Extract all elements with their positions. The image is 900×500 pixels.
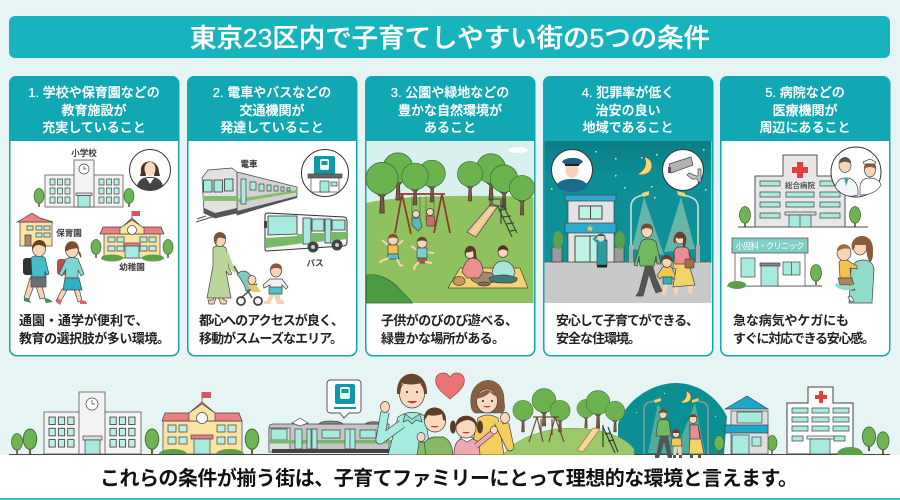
- heading: condition 4: [582, 85, 674, 135]
- ground line: [9, 454, 890, 456]
- icon: mother holding baby: [836, 236, 874, 303]
- text: condition 1 benefit: [19, 313, 170, 346]
- police station: [714, 396, 777, 454]
- icon: kindergarten: [91, 211, 173, 272]
- station speech bubble: [327, 380, 361, 418]
- heading: condition 3: 3. 公園や緑地などの: [391, 85, 509, 100]
- trees: [366, 153, 535, 215]
- heading: condition 5: [759, 85, 851, 135]
- heading: condition 5: 5. 病院などの: [765, 85, 845, 100]
- bush: [366, 275, 412, 303]
- text: condition 3 benefit: 緑豊かな場所がある。: [381, 331, 505, 346]
- text: condition 5 benefit: すぐに対応できる安心感。: [733, 331, 875, 346]
- text: condition 5 benefit: [733, 313, 875, 346]
- icon: general hospital: [738, 155, 868, 227]
- panel: condition 4 safety: [543, 76, 713, 356]
- text: condition 4 benefit: 安心して子育てができる、: [556, 313, 699, 328]
- swing set: [395, 194, 450, 234]
- hill with playground: [503, 389, 634, 455]
- conclusion band: [0, 455, 900, 500]
- panel: condition 5 medical: [720, 76, 890, 356]
- text: condition 1 benefit: 通園・通学が便利で、: [19, 313, 148, 328]
- text: condition 2 benefit: 都心へのアクセスが良く、: [199, 313, 344, 328]
- kindergarten: [159, 392, 259, 459]
- officer portrait: [552, 150, 592, 192]
- walking family: [634, 224, 695, 296]
- text: condition 3 benefit: 子供がのびのび遊べる、: [381, 313, 518, 328]
- heading: condition 5: 周辺にあること: [759, 120, 851, 135]
- conclusion band: これらの条件が揃う街は、子育てファミリーにとって理想的な環境と言えます。: [100, 466, 798, 490]
- hospital: [787, 387, 889, 461]
- police station: [552, 195, 625, 268]
- saluting officer: [594, 234, 607, 268]
- heading: condition 2: 交通機関が: [239, 103, 305, 118]
- family group: [380, 373, 510, 455]
- icon: teacher portrait: [130, 150, 170, 191]
- heading: condition 1: [28, 85, 160, 135]
- heading: condition 4: 4. 犯罪率が低く: [582, 85, 674, 100]
- camera badge: [662, 150, 704, 190]
- icon: commuter train: 電車: [240, 159, 258, 169]
- heading: condition 5: 医療機関が: [772, 103, 838, 118]
- icon: children walking to school: [23, 240, 87, 305]
- icon: nursery school: [17, 213, 82, 246]
- text: condition 1 benefit: 教育の選択肢が多い環境。: [19, 331, 170, 346]
- icon: pediatric clinic: [727, 238, 822, 289]
- icon: nursery school: 保育園: [56, 228, 82, 238]
- picnic family: [448, 245, 528, 288]
- train: [269, 418, 393, 453]
- text: condition 5 benefit: 急な病気やケガにも: [733, 313, 849, 328]
- panel: condition 1 education: [9, 76, 179, 356]
- running children: [380, 234, 434, 270]
- heading: condition 3: [391, 85, 509, 135]
- slide: [467, 198, 517, 237]
- icon: elementary school: 小学校: [71, 148, 97, 158]
- icon: bus: バス: [306, 258, 324, 268]
- panel: condition 3 nature: [365, 76, 535, 356]
- daughter: [450, 416, 498, 455]
- title banner: [9, 16, 890, 58]
- icon: general hospital: 総合病院: [785, 180, 815, 190]
- title banner: 東京23区内で子育てしやすい街の5つの条件: [190, 23, 710, 53]
- doctor and nurse badge: [831, 147, 881, 197]
- heading: condition 2: [213, 85, 331, 135]
- icon: commuter train: [196, 159, 297, 222]
- school: [12, 392, 159, 454]
- heading: condition 1: 1. 学校や保育園などの: [28, 85, 160, 100]
- text: condition 4 benefit: [556, 313, 699, 346]
- street lamps: [629, 191, 700, 262]
- heading: condition 2: 2. 電車やバスなどの: [213, 85, 331, 100]
- heart: [436, 373, 464, 399]
- icon: pediatric clinic: 小児科・クリニック: [736, 241, 804, 251]
- small walking family: [656, 410, 704, 458]
- heading: condition 1: 充実していること: [42, 120, 146, 135]
- father: [380, 374, 431, 455]
- heading: condition 3: 豊かな自然環境が: [398, 103, 502, 118]
- illustration: park scene: [366, 141, 535, 303]
- icon: bus: [264, 213, 347, 268]
- text: condition 2 benefit: [199, 313, 344, 346]
- text: condition 3 benefit: [381, 313, 518, 346]
- mother: [470, 380, 510, 455]
- stars: [551, 149, 706, 198]
- illustration: town skyline: [9, 373, 890, 461]
- moon: [637, 157, 652, 175]
- heading: condition 4: 地域であること: [583, 120, 673, 135]
- illustration: safe night street: [544, 141, 712, 303]
- heading: condition 2: 発達していること: [220, 120, 324, 135]
- icon: elementary school: [34, 148, 134, 207]
- panel: condition 2 transit: [187, 76, 357, 356]
- heading: condition 4: 治安の良い: [595, 103, 661, 118]
- icon: kindergarten: 幼稚園: [119, 262, 145, 272]
- icon: station badge: [302, 150, 348, 196]
- son: [417, 408, 453, 455]
- heading: condition 1: 教育施設が: [61, 103, 127, 118]
- night dome with family: [618, 383, 727, 454]
- small family feet overlapping band: [655, 455, 701, 458]
- text: condition 4 benefit: 安全な住環境。: [556, 331, 641, 346]
- heading: condition 3: あること: [424, 120, 476, 135]
- icon: parent with stroller and child: [207, 232, 288, 305]
- text: condition 2 benefit: 移動がスムーズなエリア。: [199, 331, 343, 346]
